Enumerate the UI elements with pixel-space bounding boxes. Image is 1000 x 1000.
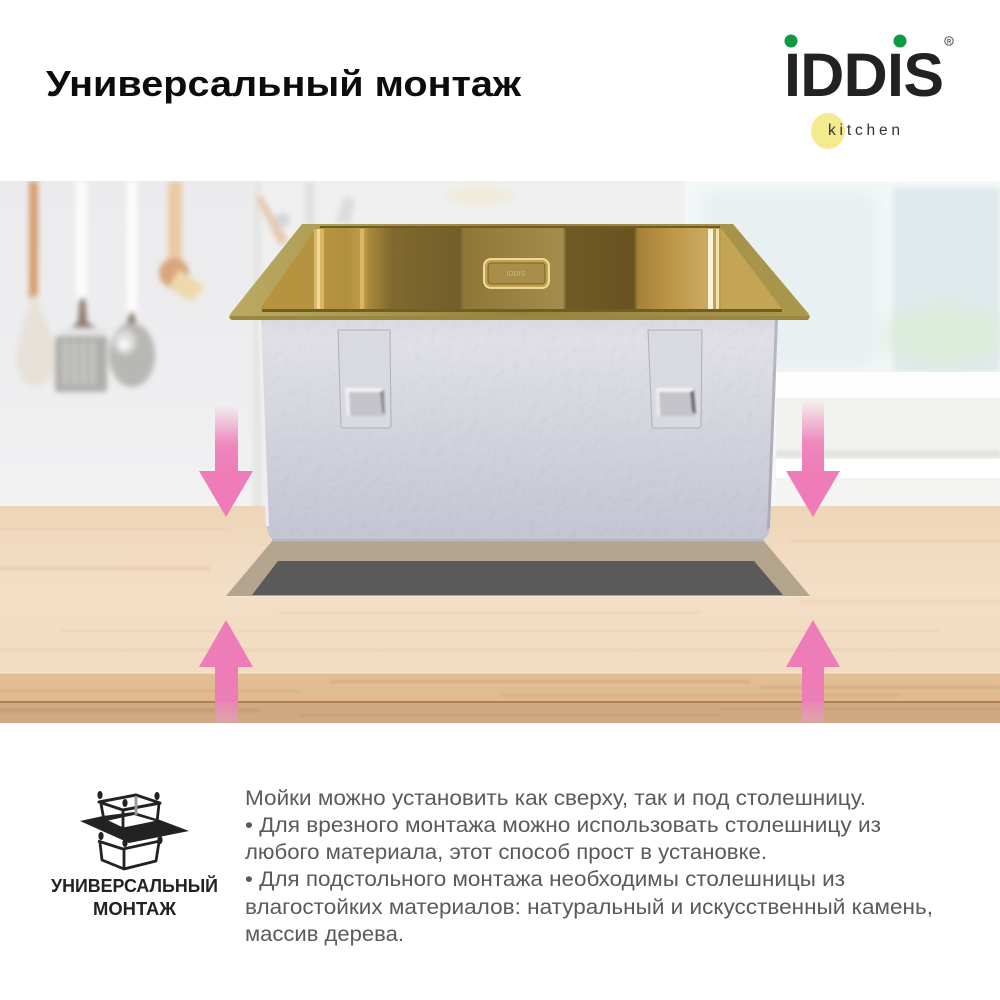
icon label: УНИВЕРСАЛЬНЫЙ — [51, 875, 218, 896]
arrow: bottom left — [199, 620, 253, 723]
plate opening — [106, 815, 155, 829]
upper sink outline — [99, 795, 160, 829]
logo: IDDIS kitchen — [784, 34, 953, 149]
sink body — [258, 318, 778, 542]
icon: universal mounting: МОНТАЖ — [93, 899, 177, 919]
icon: universal mounting — [51, 791, 218, 919]
title: Универсальный монтаж — [46, 63, 522, 104]
window background — [685, 181, 1000, 511]
description text: • Для врезного монтажа можно использовать столешницу из — [245, 813, 881, 837]
arrow: bottom right — [786, 620, 840, 723]
logo: IDDIS kitchen: R — [947, 40, 952, 46]
golden sink top — [229, 224, 810, 320]
blurred utensils — [16, 181, 205, 392]
countertop — [0, 506, 1000, 723]
description text: любого материала, этот способ прост в установке. — [245, 840, 767, 864]
description text — [245, 786, 933, 946]
counter plate — [80, 812, 189, 843]
description text: • Для подстольного монтажа необходимы столешницы из — [245, 867, 845, 891]
logo: IDDIS kitchen: IDDIS — [784, 41, 944, 109]
description text: Мойки можно установить как сверху, так и под столешницу. — [245, 786, 866, 810]
description text: влагостойких материалов: натуральный и искусственный камень, — [245, 895, 933, 919]
mounting clip right — [648, 330, 702, 428]
screws — [97, 791, 163, 847]
wall background — [0, 181, 260, 511]
arrow: top left — [199, 405, 253, 517]
drain overflow — [484, 259, 549, 288]
drain overflow: IDDIS — [507, 271, 526, 278]
kitchen scene photo — [0, 181, 1000, 723]
logo: IDDIS kitchen: kitchen — [828, 122, 900, 139]
blurred shelf items behind sink — [253, 181, 514, 511]
lower sink outline — [98, 841, 160, 869]
mounting clip left — [338, 330, 391, 428]
arrow: top right — [786, 400, 840, 517]
cut-out opening — [226, 540, 810, 597]
description text: массив дерева. — [245, 922, 404, 946]
